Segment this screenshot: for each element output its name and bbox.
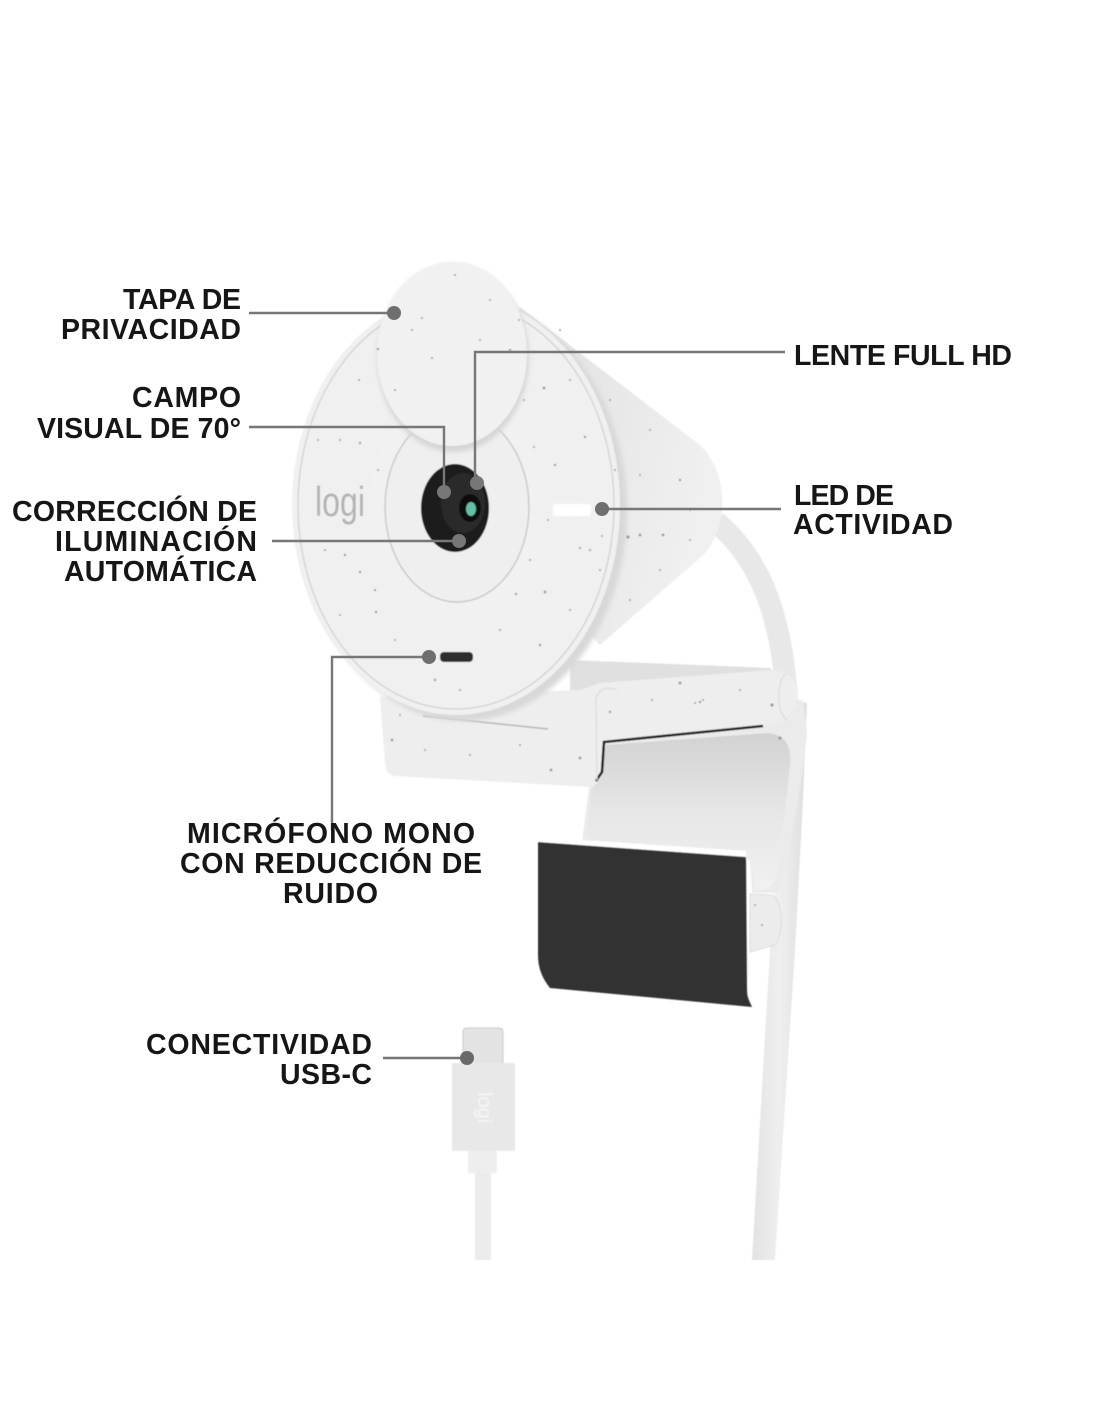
label: ACTIVIDAD xyxy=(793,509,953,541)
hinge outlines xyxy=(596,674,788,780)
mount back arm xyxy=(582,700,807,893)
lens bezel ring xyxy=(385,412,529,602)
label xyxy=(180,818,482,910)
label: TAPA DE xyxy=(123,284,241,316)
usb body xyxy=(452,1063,515,1151)
usb cable xyxy=(475,1170,491,1260)
callout: activity led xyxy=(595,480,953,541)
lens barrel xyxy=(459,494,481,522)
callout: light correction xyxy=(12,496,466,588)
leader line xyxy=(249,427,444,491)
privacy cover shadow xyxy=(377,264,529,452)
microphone xyxy=(440,652,473,662)
leader line xyxy=(383,1057,467,1059)
marker xyxy=(452,534,466,548)
marker xyxy=(422,650,436,664)
upper cable xyxy=(716,522,787,700)
callout: privacy cover xyxy=(61,284,401,346)
mount top surface xyxy=(570,660,790,705)
label: LENTE FULL HD xyxy=(794,340,1012,372)
leader line xyxy=(475,352,785,483)
privacy clip xyxy=(538,837,752,1007)
label: CAMPO xyxy=(132,382,241,414)
speckles xyxy=(317,274,782,926)
usb-c connector xyxy=(452,1028,515,1260)
lower hinge xyxy=(750,894,781,952)
label xyxy=(12,496,257,588)
face ring xyxy=(298,301,614,709)
mount base xyxy=(380,670,798,787)
label: PRIVACIDAD xyxy=(61,314,241,346)
lens inner xyxy=(441,473,485,533)
label: CON REDUCCIÓN DE xyxy=(180,848,482,880)
label: RUIDO xyxy=(283,878,378,910)
label: ILUMINACIÓN xyxy=(55,526,257,558)
label: CONECTIVIDAD xyxy=(146,1029,372,1061)
marker xyxy=(470,476,484,490)
leader line xyxy=(272,540,459,542)
LED xyxy=(553,504,591,516)
marker xyxy=(437,485,451,499)
mount inner panel xyxy=(586,733,790,890)
label: LED DE xyxy=(794,480,894,512)
mount slit xyxy=(596,726,763,781)
label xyxy=(37,382,241,445)
logo: logi xyxy=(315,478,365,525)
callout: microphone xyxy=(180,650,482,910)
callout: field of view xyxy=(37,382,451,499)
camera face xyxy=(292,295,620,715)
leader line xyxy=(249,312,394,314)
mount lip xyxy=(423,716,548,729)
label xyxy=(146,1029,372,1091)
face shadow xyxy=(299,299,627,721)
marker xyxy=(595,502,609,516)
label: MICRÓFONO MONO xyxy=(187,818,475,850)
marker xyxy=(460,1051,474,1065)
usb metal plug xyxy=(463,1028,503,1064)
marker xyxy=(387,306,401,320)
lens glass xyxy=(466,502,476,516)
webcam product xyxy=(292,262,807,1260)
label: AUTOMÁTICA xyxy=(64,556,257,588)
label: USB-C xyxy=(280,1059,372,1091)
label xyxy=(793,480,953,541)
callout: usb-c xyxy=(146,1029,474,1091)
usb strain relief xyxy=(468,1151,497,1173)
leader line xyxy=(602,508,781,510)
lower cable xyxy=(752,700,807,1260)
lens housing xyxy=(421,464,489,552)
label xyxy=(61,284,241,346)
leader line xyxy=(332,657,428,830)
label: VISUAL DE 70° xyxy=(37,413,241,445)
camera cone xyxy=(456,307,722,645)
privacy cover xyxy=(377,262,527,446)
clip highlight xyxy=(538,837,746,860)
callout: full hd lens xyxy=(470,340,1012,490)
usb logo: logi xyxy=(473,1092,495,1123)
label: CORRECCIÓN DE xyxy=(12,496,257,528)
clip body xyxy=(538,842,752,1007)
lens xyxy=(421,464,489,552)
